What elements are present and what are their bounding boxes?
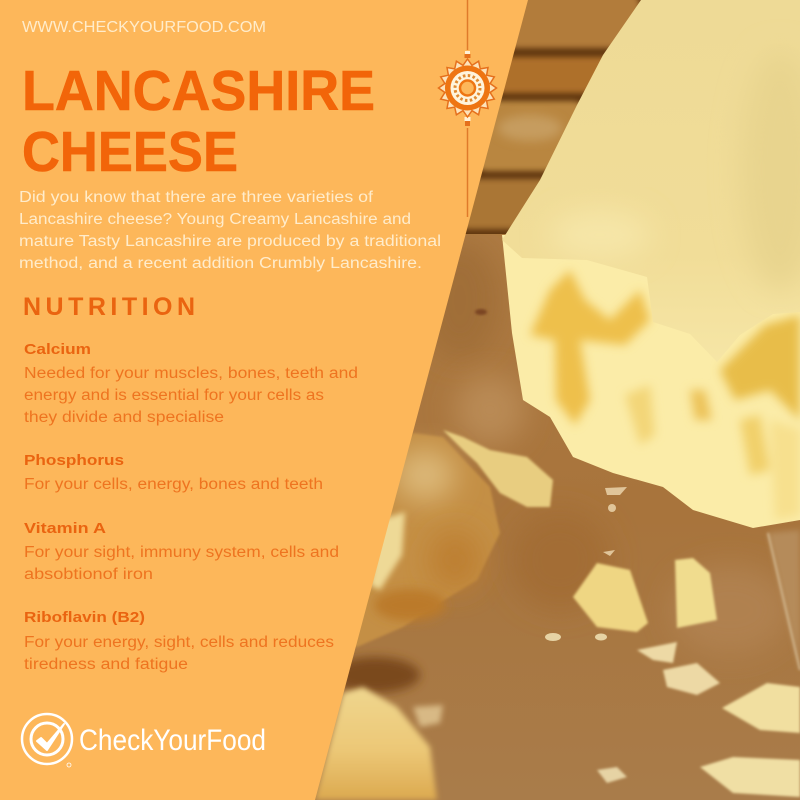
nutrient: calcium: they divide and specialise — [24, 409, 224, 426]
nutrient: calcium: Needed for your muscles, bones, teeth and — [24, 365, 358, 382]
large cracker foreground — [330, 430, 553, 647]
title — [22, 59, 375, 184]
title: LANCASHIRE — [22, 59, 375, 123]
blurred cheese foreground — [315, 687, 443, 800]
nutrient: vitamin a — [24, 520, 339, 583]
nutrient: phosphorus: Phosphorus — [24, 452, 124, 469]
intro paragraph: Did you know that there are three varieties of — [19, 189, 374, 206]
icon: mandala ornament with vertical line — [438, 0, 496, 217]
crackers in background — [440, 0, 670, 234]
intro paragraph — [19, 189, 441, 272]
nutrient: riboflavin — [24, 609, 334, 673]
nutrient: vitamin a: Vitamin A — [24, 520, 106, 537]
orange diagonal panel — [0, 0, 528, 800]
website url: WWW.CHECKYOURFOOD.COM — [22, 19, 266, 36]
nutrient: riboflavin: For your energy, sight, cells and reduces — [24, 634, 334, 651]
cheese block — [500, 0, 800, 535]
cheese crumbly face — [500, 235, 800, 535]
crumb on cracker — [443, 430, 553, 507]
nutrient: vitamin a: For your sight, immuny system, cells and — [24, 544, 339, 561]
nutrient: riboflavin: tiredness and fatigue — [24, 656, 188, 673]
nutrient: calcium — [24, 341, 358, 426]
logo: CheckYourFood: CheckYourFood — [79, 724, 266, 757]
nutrient: vitamin a: absobtionof iron — [24, 566, 153, 583]
intro paragraph: mature Tasty Lancashire are produced by a traditional — [19, 233, 441, 250]
nutrient: calcium: Calcium — [24, 341, 91, 358]
photo: cheese and crackers on a wooden board — [300, 0, 800, 800]
cheese top face — [500, 0, 800, 365]
nutrient: riboflavin: Riboflavin (B2) — [24, 609, 145, 626]
intro paragraph: method, and a recent addition Crumbly Lancashire. — [19, 255, 422, 272]
cheese crumbs — [545, 487, 800, 797]
title: CHEESE — [22, 120, 238, 184]
wooden board — [300, 225, 800, 800]
nutrient: phosphorus — [24, 452, 323, 493]
nutrient: calcium: energy and is essential for your cells as — [24, 387, 324, 404]
nutrient: phosphorus: For your cells, energy, bones and teeth — [24, 476, 323, 493]
heading: nutrition: NUTRITION — [23, 293, 195, 321]
logo: CheckYourFood — [22, 714, 266, 767]
intro paragraph: Lancashire cheese? Young Creamy Lancashire and — [19, 211, 411, 228]
